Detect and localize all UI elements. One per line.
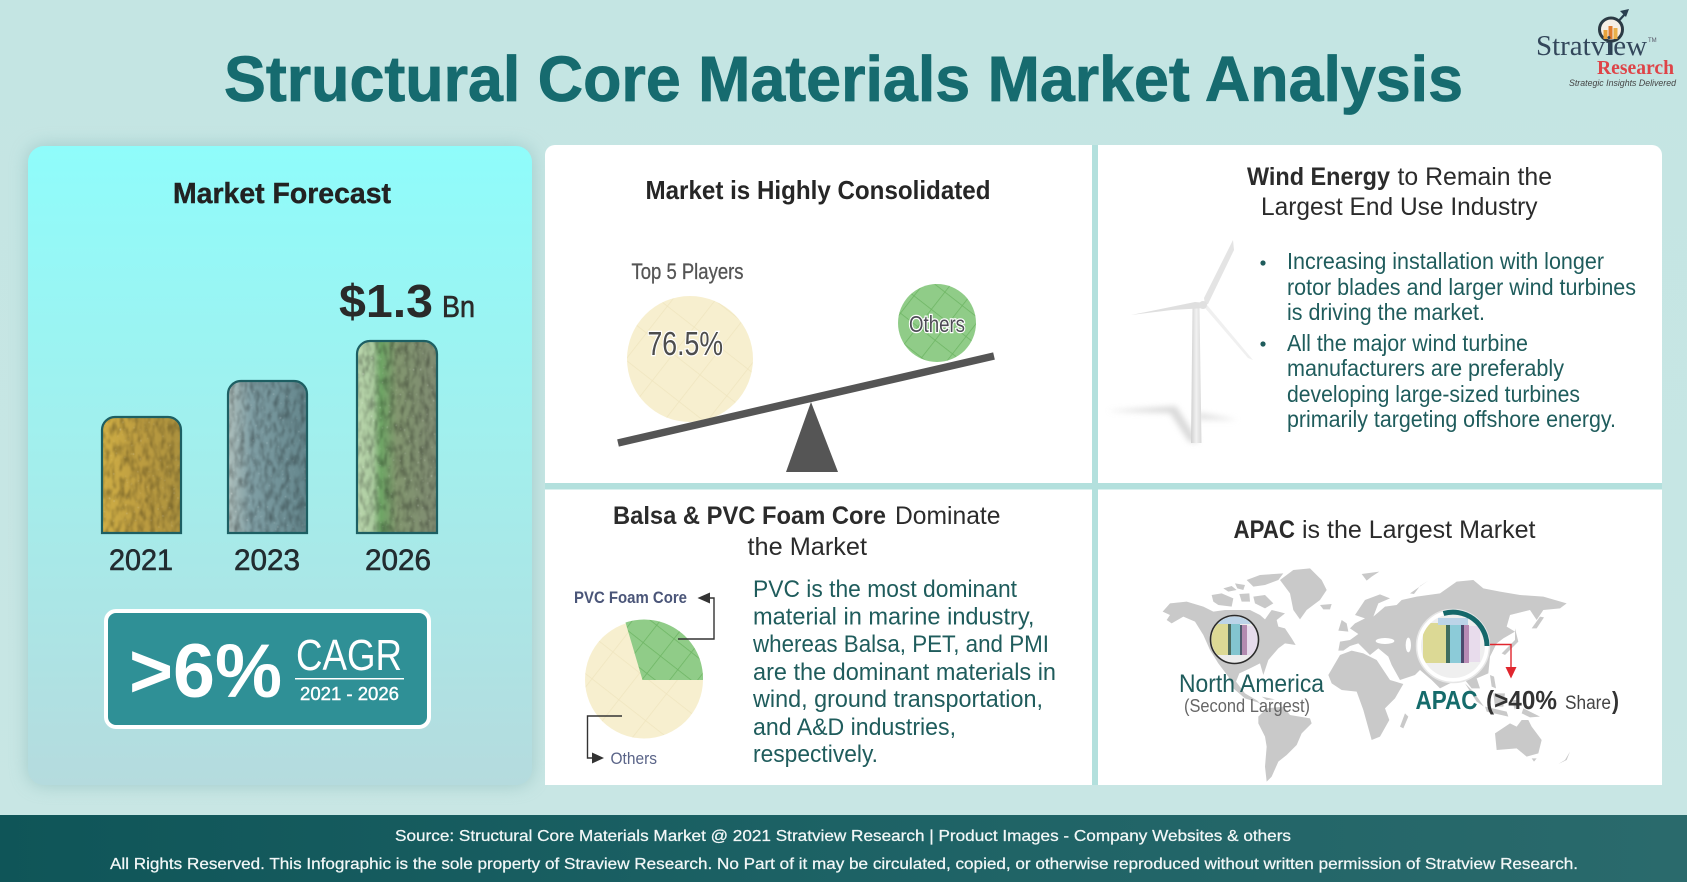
- bullet list: primarily targeting offshore energy.: [1287, 406, 1616, 432]
- label: APAC share: (>40%: [1486, 685, 1557, 715]
- value label: $1.3 Bn: $1.3: [339, 275, 433, 327]
- label: north america: North America: [1179, 670, 1324, 698]
- bullet list: Increasing installation with longer: [1287, 248, 1604, 274]
- arrow: red: [1490, 644, 1516, 678]
- heading: Market is Highly Consolidated: [646, 175, 990, 205]
- icon: wind turbine: [1107, 240, 1253, 443]
- label: others: Others: [610, 749, 657, 768]
- circle: others: [898, 284, 976, 362]
- seesaw fulcrum: [786, 402, 838, 472]
- callout: CAGR: >6%: [129, 629, 282, 714]
- text block: wind, ground transportation,: [752, 686, 1043, 713]
- panel: market is highly consolidated: [545, 145, 1092, 483]
- panel: wind energy: [1098, 145, 1662, 483]
- seesaw beam: [618, 356, 994, 443]
- marker: APAC: [1416, 610, 1490, 682]
- label: north america: (Second Largest): [1184, 696, 1310, 716]
- label: PVC foam core: PVC Foam Core: [574, 588, 687, 607]
- text block: whereas Balsa, PET, and PMI: [752, 631, 1049, 658]
- eurasia, australia and islands: [1338, 572, 1570, 764]
- panel: APAC largest market: [1098, 490, 1662, 785]
- value label: $1.3 Bn: Bn: [442, 289, 475, 324]
- circle: others: Others: [909, 311, 965, 337]
- heading: market forecast: Market Forecast: [173, 178, 391, 210]
- callout: CAGR: 2021 - 2026: [300, 684, 399, 704]
- text block: are the dominant materials in: [753, 659, 1056, 686]
- bar: 2026: 2026: [365, 544, 431, 577]
- bar: 2023: [228, 381, 307, 577]
- bar: 2021: 2021: [109, 544, 173, 577]
- text block: respectively.: [753, 741, 878, 768]
- label: APAC share: [1416, 685, 1619, 715]
- heading: is the Largest Market: [1302, 516, 1536, 544]
- logo: Stratview Research: Research: [1597, 57, 1674, 79]
- logo: Stratview Research: TM: [1648, 38, 1657, 44]
- panel: market forecast: [28, 146, 532, 785]
- text block: material in marine industry,: [753, 604, 1034, 630]
- marker: north america: [1210, 616, 1258, 664]
- footer: [0, 815, 1687, 882]
- heading: Largest End Use Industry: [1261, 193, 1538, 221]
- bullet list: developing large-sized turbines: [1287, 381, 1580, 407]
- americas, greenland and arctic islands: [1163, 568, 1408, 782]
- callout: CAGR: CAGR: [296, 631, 402, 680]
- bar chart: market forecast: [102, 341, 437, 577]
- heading: [1247, 163, 1552, 221]
- label: APAC share: APAC: [1416, 685, 1478, 715]
- arrow: others: [588, 716, 622, 764]
- logo: Stratview Research: Strategic Insights Delivered: [1569, 78, 1677, 89]
- icon: magnifier with chart and arrow: [1600, 9, 1629, 55]
- circle: top 5 players share: [627, 296, 753, 422]
- circle: top 5 players share: 76.5%: [648, 325, 723, 362]
- label: APAC share: ): [1612, 687, 1619, 715]
- source line: Source: Structural Core Materials Market @ 2021 Stratview Research | Product Images - Company Websites & others: [395, 828, 1291, 845]
- bar: 2026: [357, 341, 437, 577]
- title: Structural Core Materials Market Analysis: [224, 43, 1463, 115]
- pie chart: [585, 620, 703, 738]
- bar: 2021: [102, 417, 181, 577]
- heading: Balsa & PVC Foam Core: [613, 502, 886, 530]
- heading: Wind Energy: [1247, 163, 1390, 191]
- label: APAC share: Share: [1565, 693, 1611, 714]
- arrow: PVC foam core: [678, 592, 714, 639]
- label: top 5 players: Top 5 Players: [632, 259, 744, 284]
- bullet list: [1260, 248, 1636, 432]
- bullet list: is driving the market.: [1287, 299, 1485, 325]
- world map: [1163, 568, 1570, 782]
- text block: PVC is the most dominant: [753, 576, 1017, 603]
- bar: 2023: 2023: [234, 544, 300, 577]
- bullet list: manufacturers are preferably: [1287, 355, 1564, 381]
- value label: $1.3 Bn: [339, 275, 475, 327]
- panel: balsa and PVC foam core: [545, 490, 1092, 785]
- rights line: All Rights Reserved. This Infographic is the sole property of Straview Research. No Part of it may be circulated, copied, or otherwise reproduced without written permission of Stratview Research.: [110, 856, 1578, 873]
- heading: Dominate: [895, 502, 1000, 530]
- heading: APAC: [1234, 516, 1295, 544]
- label: north america: [1179, 670, 1324, 716]
- bullet list: All the major wind turbine: [1287, 330, 1528, 356]
- text block: and A&D industries,: [753, 714, 956, 741]
- heading: [613, 502, 1000, 561]
- heading: to Remain the: [1398, 163, 1552, 191]
- heading: the Market: [748, 533, 867, 561]
- text block: [752, 576, 1056, 768]
- logo: Stratview Research: Stratview: [1536, 31, 1648, 62]
- callout: CAGR: [106, 611, 429, 727]
- bullet list: rotor blades and larger wind turbines: [1287, 274, 1636, 300]
- logo: Stratview Research: [1536, 9, 1677, 89]
